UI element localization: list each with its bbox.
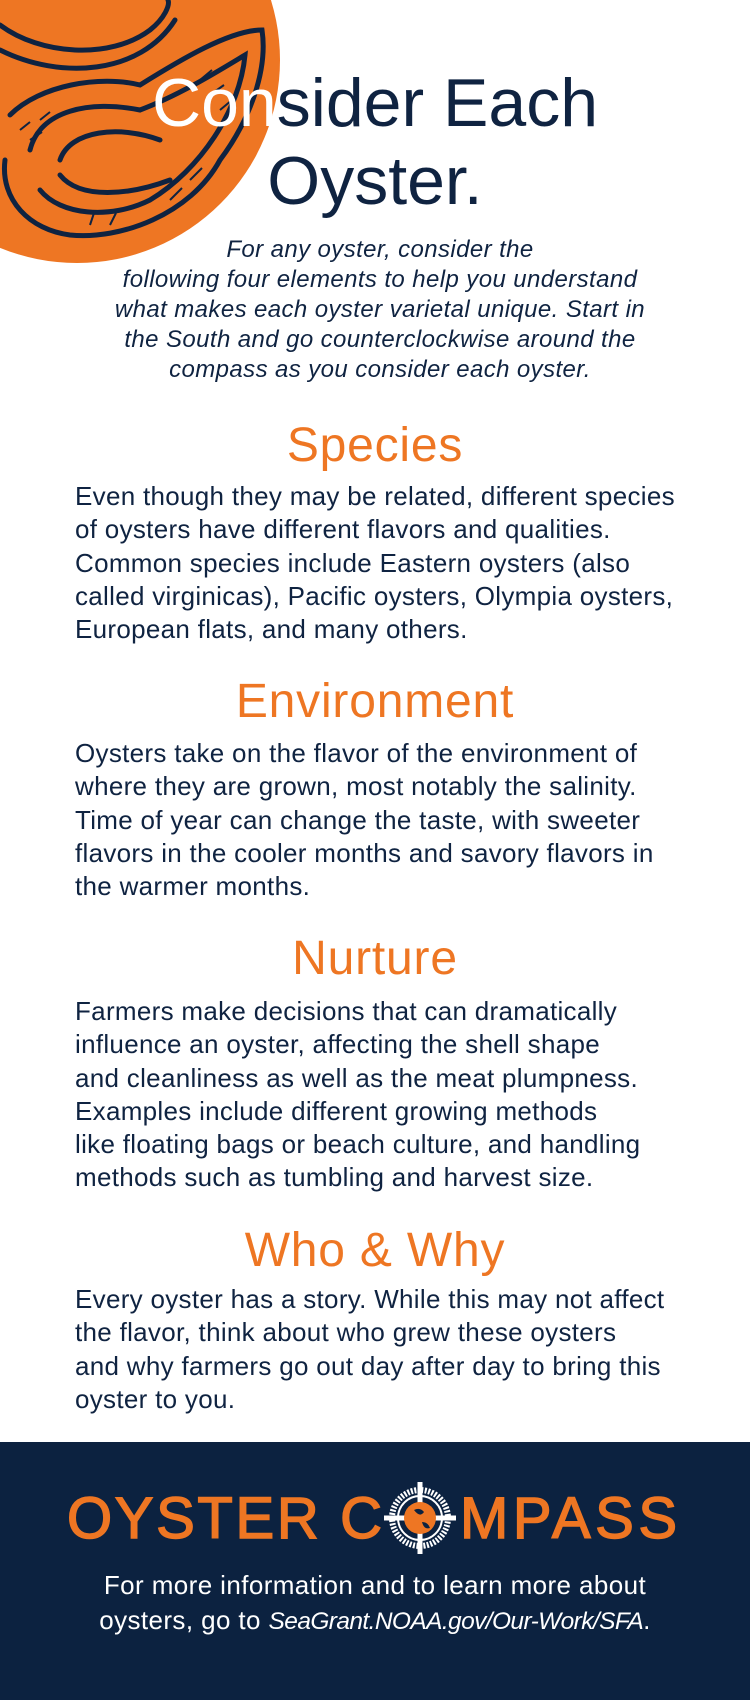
intro text: what makes each oyster varietal unique. Start in [115, 296, 645, 323]
text: Species: European flats, and many others. [75, 614, 468, 644]
text: Species: of oysters have different flavors and qualities. [75, 514, 611, 544]
footer panel [0, 1442, 750, 1700]
text: Nurture: like floating bags or beach culture, and handling [75, 1129, 640, 1159]
text: Nurture [75, 996, 640, 1192]
text: Who & Why: oyster to you. [75, 1384, 235, 1414]
icon: compass emblem [384, 1482, 456, 1554]
heading: Who & Why: Who & Why [245, 1224, 505, 1277]
illustration: orange circle with oyster drawing [0, 0, 280, 263]
text: Species: Even though they may be related, different species [75, 481, 675, 511]
text: Who & Why: Every oyster has a story. While this may not affect [75, 1284, 664, 1314]
text: Who & Why: the flavor, think about who grew these oysters [75, 1317, 616, 1347]
heading: Species: Species [287, 419, 463, 472]
intro text [115, 236, 645, 383]
intro text: following four elements to help you understand [123, 266, 637, 293]
logo: Oyster Compass: OYSTER C [67, 1486, 382, 1551]
text: Who & Why [75, 1284, 664, 1414]
text: Environment: Time of year can change the taste, with sweeter [75, 805, 640, 835]
text: Environment: where they are grown, most notably the salinity. [75, 771, 637, 801]
logo: Oyster Compass [67, 1482, 677, 1554]
text: Who & Why: and why farmers go out day after day to bring this [75, 1351, 661, 1381]
title: Consider Each [152, 65, 598, 141]
intro text: the South and go counterclockwise around the [124, 326, 636, 353]
heading: Environment: Environment [236, 675, 514, 728]
text: Nurture: and cleanliness as well as the meat plumpness. [75, 1063, 638, 1093]
text: Environment: the warmer months. [75, 871, 310, 901]
footer text: oysters, go to SeaGrant.NOAA.gov/Our-Work/SFA. [99, 1605, 651, 1635]
text: Species [75, 481, 675, 644]
text: Environment: flavors in the cooler months and savory flavors in [75, 838, 654, 868]
intro text: For any oyster, consider the [226, 236, 534, 263]
text: Nurture: influence an oyster, affecting the shell shape [75, 1029, 600, 1059]
text: Species: Common species include Eastern oysters (also [75, 548, 630, 578]
footer text: For more information and to learn more about [104, 1570, 646, 1600]
intro text: compass as you consider each oyster. [169, 356, 591, 383]
footer text [99, 1570, 651, 1635]
title [152, 65, 598, 219]
logo: Oyster Compass: MPASS [460, 1486, 677, 1551]
title: Oyster. [267, 143, 483, 219]
text: Nurture: Farmers make decisions that can dramatically [75, 996, 617, 1026]
heading: Nurture: Nurture [292, 932, 458, 985]
text: Species: called virginicas), Pacific oysters, Olympia oysters, [75, 581, 673, 611]
text: Environment [75, 738, 654, 901]
text: Nurture: Examples include different growing methods [75, 1096, 597, 1126]
text: Nurture: methods such as tumbling and harvest size. [75, 1162, 593, 1192]
text: Environment: Oysters take on the flavor of the environment of [75, 738, 637, 768]
